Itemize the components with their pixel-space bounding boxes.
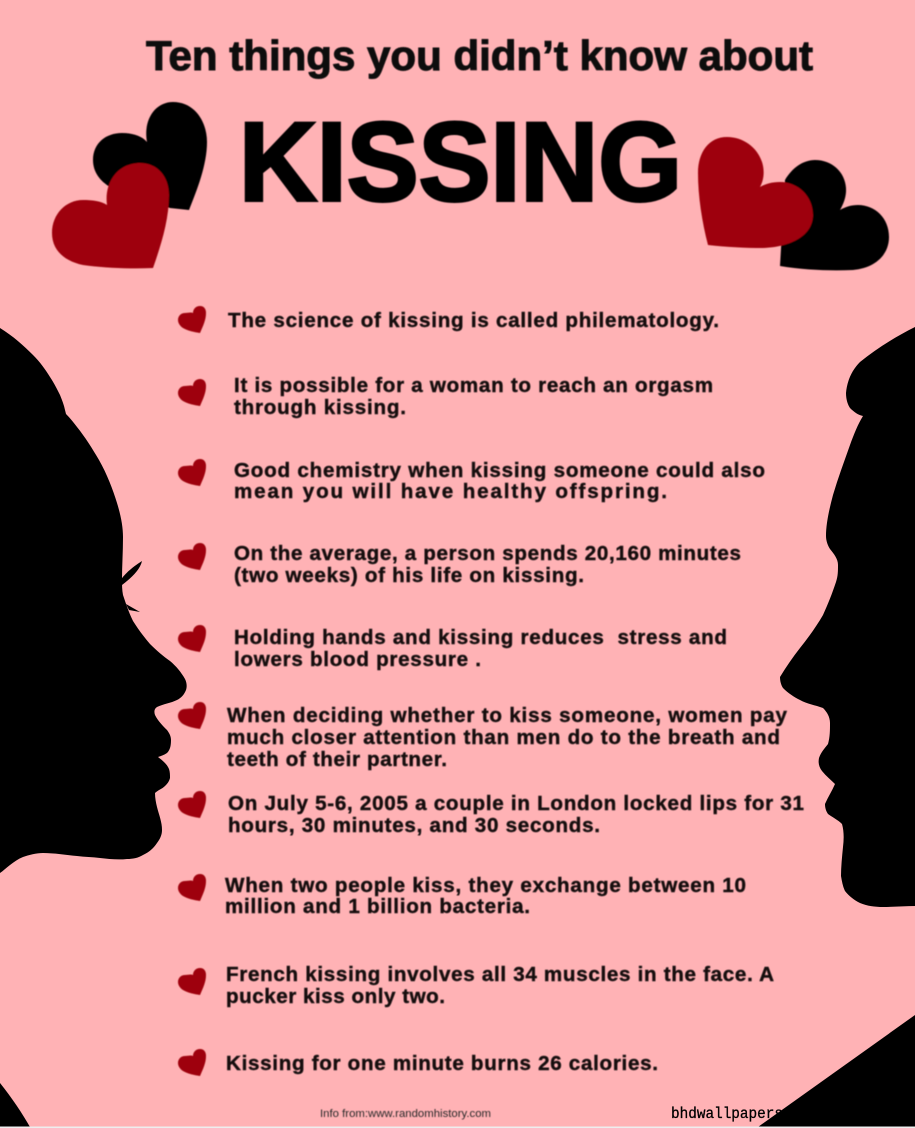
watermark: bhdwallpapers <box>671 1105 783 1123</box>
text: fact 6: much closer attention than men do to the breath and <box>227 726 780 749</box>
text: fact 4: On the average, a person spends 20,160 minutes <box>234 542 741 565</box>
text: fact 7: hours, 30 minutes, and 30 seconds. <box>228 814 600 837</box>
icon: left heart pair <box>52 102 207 268</box>
icon: bullet heart 3 <box>178 459 206 486</box>
fact 5 <box>178 625 727 671</box>
text: fact 6: When deciding whether to kiss someone, women pay <box>227 704 788 727</box>
icon: bullet heart 2 <box>178 379 206 406</box>
fact 1 <box>178 306 719 333</box>
text: fact 3: mean you will have healthy offspring. <box>234 480 667 503</box>
icon: right heart pair <box>698 137 889 270</box>
fact 9 <box>178 963 774 1008</box>
text: fact 5: lowers blood pressure . <box>234 648 481 671</box>
icon: red heart right <box>698 137 813 248</box>
text: fact 9: pucker kiss only two. <box>226 985 445 1008</box>
eyelash: upper <box>120 561 142 585</box>
icon: bullet heart 5 <box>178 625 206 652</box>
bottom edge <box>0 1126 915 1128</box>
shape: bottom left corner <box>0 1083 30 1127</box>
fact 4 <box>178 542 741 587</box>
text: fact 8: million and 1 billion bacteria. <box>225 895 530 918</box>
icon: black heart left <box>93 102 207 210</box>
eyelash: lower <box>126 604 140 612</box>
text: fact 1: The science of kissing is called philematology. <box>228 309 719 332</box>
text: fact 2: It is possible for a woman to reach an orgasm <box>234 374 713 397</box>
silhouette: woman's face on left <box>0 328 187 873</box>
fact 3 <box>178 459 765 503</box>
icon: bullet heart 10 <box>178 1049 206 1076</box>
icon: bullet heart 4 <box>178 543 206 570</box>
icon: red heart left <box>52 163 169 268</box>
fact 7 <box>178 791 804 837</box>
fact 2 <box>178 374 713 419</box>
icon: bullet heart 6 <box>178 702 206 729</box>
text: fact 5: Holding hands and kissing reduces stress and <box>234 626 727 649</box>
text: fact 2: through kissing. <box>234 396 406 419</box>
text: fact 6: teeth of their partner. <box>227 748 447 771</box>
silhouette: man's face on right <box>780 327 915 907</box>
icon: black heart right <box>780 160 889 270</box>
icon: bullet heart 1 <box>178 306 206 333</box>
title: kissing: KISSING <box>239 100 682 224</box>
fact 10 <box>178 1049 658 1076</box>
title: ten things you didn't know about: Ten things you didn’t know about <box>146 32 813 79</box>
text: fact 7: On July 5-6, 2005 a couple in London locked lips for 31 <box>228 792 804 815</box>
text: fact 3: Good chemistry when kissing someone could also <box>234 459 765 482</box>
shape: bottom right corner <box>758 1015 915 1127</box>
icon: bullet heart 8 <box>178 874 206 901</box>
text: fact 9: French kissing involves all 34 muscles in the face. A <box>226 963 774 986</box>
fact 6 <box>178 702 788 771</box>
text: fact 10: Kissing for one minute burns 26 calories. <box>226 1052 658 1075</box>
fact 8 <box>178 874 746 918</box>
text: fact 4: (two weeks) of his life on kissing. <box>234 564 584 587</box>
icon: bullet heart 7 <box>178 791 206 818</box>
bullet list: ten facts <box>178 306 804 1076</box>
source credit: Info from:www.randomhistory.com <box>320 1108 491 1120</box>
icon: bullet heart 9 <box>178 968 206 995</box>
text: fact 8: When two people kiss, they exchange between 10 <box>225 874 746 897</box>
